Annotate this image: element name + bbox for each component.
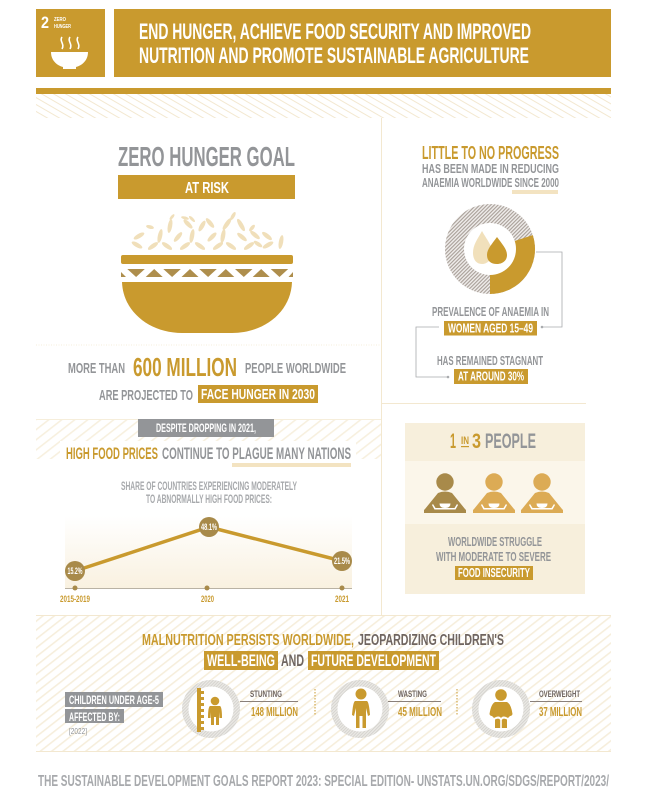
heading: 1 in 3 people: IN [461, 435, 469, 447]
heading: zero hunger goal: ZERO HUNGER GOAL [118, 141, 295, 172]
heading: little to no progress: LITTLE TO NO PROGRESS [422, 143, 559, 163]
arrow: women aged to stagnant [416, 327, 449, 378]
text: worldwide struggle: WITH MODERATE TO SEVERE [436, 550, 551, 564]
stat: stunting [240, 689, 298, 719]
panel: malnutrition [36, 615, 611, 752]
goal icon: SDG 2 zero hunger: HUNGER [54, 24, 71, 30]
panel: 1 in 3 people [405, 423, 585, 594]
chart subtitle: TO ABNORMALLY HIGH FOOD PRICES: [146, 494, 272, 506]
label: children under age 5: CHILDREN UNDER AGE-5 [69, 693, 159, 707]
stat: stunting: 148 MILLION [251, 705, 298, 719]
text: more than 600 million: FACE HUNGER IN 2030 [201, 386, 315, 403]
text: more than 600 million: MORE THAN [68, 360, 125, 377]
background hatch [36, 419, 381, 459]
heading: malnutrition persists [142, 632, 504, 670]
heading: malnutrition persists: AND [281, 651, 304, 670]
heading: malnutrition persists: JEOPARDIZING CHILDREN'S [358, 632, 504, 649]
text: has remained stagnant: AT AROUND 30% [458, 370, 524, 384]
stat: wasting: WASTING [398, 689, 427, 700]
icon: person eating, dark [424, 473, 466, 513]
line chart: food prices: 48.1% [201, 522, 217, 532]
stat: wasting [388, 689, 442, 719]
line chart: food prices: 21.5% [334, 556, 350, 566]
text: more than 600 million: ARE PROJECTED TO [99, 387, 193, 404]
panel: high food prices [36, 419, 381, 604]
panel: zero hunger goal at risk [68, 141, 346, 404]
heading: malnutrition persists: MALNUTRITION PERSISTS WORLDWIDE, [142, 632, 354, 649]
text: has remained stagnant [437, 354, 543, 384]
label: children under age 5 [65, 692, 163, 736]
panel: anaemia progress [416, 143, 562, 384]
heading: little to no progress [422, 143, 559, 194]
donut chart: 30 percent anaemia [445, 204, 535, 294]
stat: overweight: OVERWEIGHT [539, 689, 580, 700]
heading: 1 in 3 people [450, 430, 536, 453]
label: despite dropping [138, 419, 274, 437]
heading: little to no progress: ANAEMIA WORLDWIDE SINCE 2000 [422, 176, 559, 190]
chart subtitle: SHARE OF COUNTRIES EXPERIENCING MODERATELY [121, 481, 297, 493]
heading: 1 in 3 people: 1 [450, 430, 456, 453]
text: worldwide struggle [436, 535, 551, 580]
heading: 1 in 3 people: 3 [472, 430, 481, 453]
line chart: food prices: 15.2% [68, 566, 82, 576]
line chart: food prices: 2015-2019 [60, 594, 90, 604]
stat: overweight: 37 MILLION [539, 705, 582, 719]
heading: high food prices [66, 444, 351, 467]
goal icon: SDG 2 zero hunger: 2 [41, 13, 49, 32]
line chart: food prices: 2021 [335, 594, 349, 604]
stat: stunting: STUNTING [250, 689, 282, 700]
text: prevalence of anaemia [432, 305, 549, 336]
stat: wasting: 45 MILLION [398, 705, 442, 719]
at risk bar [118, 175, 295, 199]
at risk bar: AT RISK [185, 180, 229, 197]
text: more than 600 million: PEOPLE WORLDWIDE [245, 360, 346, 377]
icon: bowl [121, 255, 293, 333]
heading: high food prices: CONTINUE TO PLAGUE MANY NATIONS [162, 444, 351, 463]
line chart: food prices: 2020 [201, 594, 214, 604]
icon: stunting child [182, 680, 240, 738]
icon: wasting child [331, 680, 389, 738]
icon: person eating, light [521, 473, 563, 513]
text: prevalence of anaemia: WOMEN AGED 15–49 [448, 322, 533, 336]
chart subtitle [121, 481, 297, 506]
label: despite dropping: DESPITE DROPPING IN 2021, [156, 421, 256, 435]
text: worldwide struggle: WORLDWIDE STRUGGLE [448, 535, 542, 549]
icon: overweight child [472, 680, 530, 738]
line chart: food prices [60, 516, 352, 604]
icon: rice grains [131, 211, 284, 251]
text: worldwide struggle: FOOD INSECURITY [458, 566, 530, 580]
goal icon: SDG 2 zero hunger: ZERO [54, 17, 66, 23]
goal icon: SDG 2 zero hunger [36, 9, 105, 77]
heading: little to no progress: HAS BEEN MADE IN REDUCING [422, 162, 559, 176]
icon: person eating, light [473, 473, 515, 513]
label: children under age 5: AFFECTED BY: [69, 710, 120, 724]
text: has remained stagnant: HAS REMAINED STAGNANT [437, 354, 543, 368]
stat: overweight [530, 689, 582, 719]
label: children under age 5: [2022] [69, 727, 87, 736]
text: prevalence of anaemia: PREVALENCE OF ANAEMIA IN [432, 305, 549, 319]
heading: malnutrition persists: FUTURE DEVELOPMENT [311, 651, 436, 670]
heading: high food prices: HIGH FOOD PRICES [66, 444, 158, 463]
header banner [114, 9, 611, 77]
arrow: donut to women aged 15-49 [536, 252, 562, 328]
heading: malnutrition persists: WELL-BEING [207, 651, 275, 670]
text: more than 600 million [68, 352, 346, 404]
heading: 1 in 3 people: PEOPLE [485, 430, 536, 453]
text: more than 600 million: 600 MILLION [133, 352, 237, 382]
